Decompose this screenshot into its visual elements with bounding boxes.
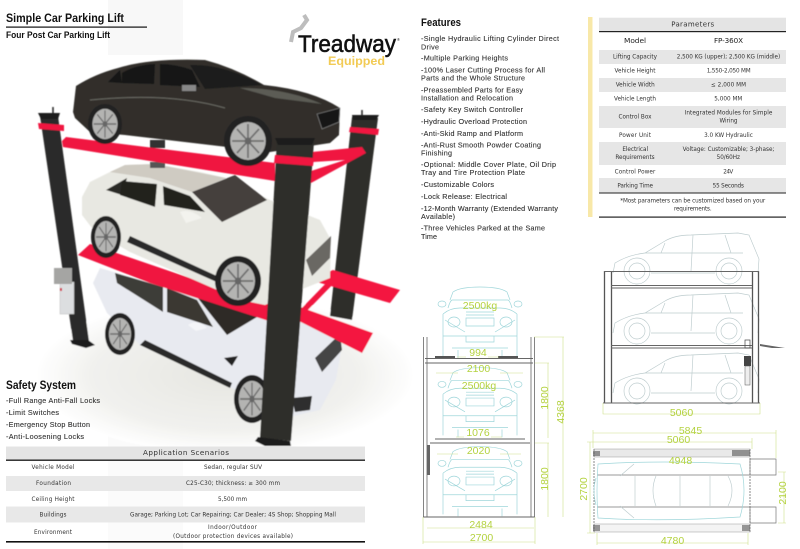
logo: Treadway Equipped: Equipped bbox=[328, 54, 385, 68]
table: parameters: Requirements bbox=[615, 155, 655, 161]
drawing: front elevation: 4368 bbox=[555, 400, 567, 424]
drawing: front elevation: 1800 bbox=[539, 386, 551, 410]
back right post bbox=[330, 110, 379, 320]
table: parameters: Power Unit bbox=[619, 133, 652, 139]
drawing: plan view: 2100 bbox=[777, 481, 789, 505]
text block: features: Time bbox=[421, 232, 437, 241]
text block: features bbox=[421, 17, 559, 241]
table: parameters: 55 Seconds bbox=[713, 183, 744, 189]
table: application scenarios: C25-C30; thickness: ≥ 300 mm bbox=[186, 481, 280, 487]
drawing: front elevation: 2020 bbox=[467, 445, 490, 457]
table: parameters: Vehicle Height bbox=[614, 69, 656, 75]
drawing: plan view bbox=[578, 425, 789, 547]
drawing: front elevation bbox=[423, 287, 567, 544]
table: parameters: Model bbox=[624, 36, 646, 45]
drawing: front elevation: 2500kg bbox=[463, 300, 497, 312]
floor shadow bbox=[35, 297, 415, 453]
table: parameters: Parking Time bbox=[617, 183, 654, 189]
logo: Treadway Equipped bbox=[291, 15, 400, 68]
text block: features: -100% Laser Cutting Process for All bbox=[421, 66, 545, 74]
photo: four post lift with three cars bbox=[35, 60, 415, 453]
front post bbox=[255, 138, 315, 446]
text block: features: -Preassembled Parts for Easy bbox=[421, 86, 523, 94]
table: parameters: Control Box bbox=[618, 115, 652, 121]
table: parameters: Integrated Modules for Simple bbox=[685, 111, 773, 117]
back left post bbox=[38, 107, 95, 348]
table: parameters: Vehicle Length bbox=[614, 97, 656, 103]
text block: features: -12-Month Warranty (Extended Warranty bbox=[421, 204, 558, 213]
table: application scenarios: Buildings bbox=[40, 512, 67, 518]
logo: Treadway Equipped: ® bbox=[397, 37, 400, 42]
table: application scenarios: Indoor/Outdoor bbox=[208, 525, 258, 531]
table: application scenarios: Sedan, regular SUV bbox=[204, 465, 262, 471]
hydraulic power unit bbox=[54, 268, 74, 314]
table: application scenarios bbox=[6, 446, 365, 543]
text block: features: Available) bbox=[421, 212, 455, 221]
text block: features: Drive bbox=[421, 42, 439, 52]
drawing: front elevation: 1076 bbox=[466, 427, 490, 439]
table: parameters: ≤ 2,000 MM bbox=[711, 83, 746, 89]
text block: features: -Anti-Rust Smooth Powder Coating bbox=[421, 140, 541, 150]
table: parameters: 24V bbox=[723, 169, 733, 175]
drawing: plan view: 2700 bbox=[578, 477, 590, 501]
text block: features: -Single Hydraulic Lifting Cylinder Direct bbox=[421, 34, 559, 43]
text block: features: -Optional: Middle Cover Plate, Oil Drip bbox=[421, 160, 556, 169]
table: parameters: *Most parameters can be customized based on your bbox=[620, 199, 766, 205]
drawing: plan view: 5845 bbox=[679, 425, 702, 437]
table: parameters: FP-360X bbox=[714, 36, 743, 45]
text block: features: Finishing bbox=[421, 148, 452, 158]
drawing: front elevation: 1800 bbox=[539, 467, 551, 491]
table: parameters: Lifting Capacity bbox=[613, 55, 658, 61]
top platform bbox=[62, 137, 366, 183]
table: parameters: Parameters bbox=[671, 20, 715, 28]
drawing: side elevation bbox=[603, 233, 785, 419]
table: application scenarios: Application Scenarios bbox=[143, 448, 229, 457]
text block: features: -Hydraulic Overload Protection bbox=[421, 117, 527, 126]
heading: product title: Four Post Car Parking Lift bbox=[6, 30, 110, 40]
text block: features: -Safety Key Switch Controller bbox=[421, 105, 524, 114]
logo: Treadway Equipped: Treadway bbox=[298, 31, 396, 58]
accent bar bbox=[588, 17, 592, 217]
table: application scenarios: 5,500 mm bbox=[218, 497, 247, 503]
text block: safety system: -Full Range Anti-Fall Locks bbox=[6, 396, 100, 405]
table: parameters: Electrical bbox=[622, 147, 648, 153]
drawing: side elevation: 5060 bbox=[670, 407, 693, 419]
top car: black sedan bbox=[73, 60, 340, 166]
text block: safety system bbox=[6, 380, 100, 441]
table: parameters: 5,000 MM bbox=[714, 97, 742, 103]
table: parameters: Control Power bbox=[615, 169, 656, 175]
table: parameters: 2,500 KG (upper); 2,500 KG (middle) bbox=[677, 55, 780, 61]
heading: product title: Simple Car Parking Lift bbox=[6, 11, 124, 25]
middle car: white SUV bbox=[82, 164, 331, 306]
text block: features: Parts and the Whole Structure bbox=[421, 74, 525, 82]
table: parameters: requirements. bbox=[674, 207, 712, 213]
text block: features: -Three Vehicles Parked at the Same bbox=[421, 224, 545, 232]
drawing: front elevation: 2484 bbox=[469, 519, 493, 531]
text block: features: -Anti-Skid Ramp and Platform bbox=[421, 129, 523, 138]
drawing: front elevation: 2500kg bbox=[462, 380, 496, 392]
text block: features: -Customizable Colors bbox=[421, 180, 494, 189]
drawing: plan view: 4948 bbox=[669, 455, 692, 467]
table: application scenarios: Garage; Parking Lot; Car Repairing; Car Dealer; 4S Shop; Shopping Mall bbox=[130, 512, 336, 518]
table: application scenarios: Foundation bbox=[36, 481, 71, 487]
text block: features: -Multiple Parking Heights bbox=[421, 54, 508, 62]
drawing: front elevation: 2700 bbox=[470, 532, 493, 544]
table: parameters: 50/60Hz bbox=[717, 155, 740, 161]
text block: features: -Lock Release: Electrical bbox=[421, 192, 507, 201]
table: application scenarios: (Outdoor protection devices available) bbox=[173, 534, 293, 540]
bottom car: white SUV bbox=[93, 268, 342, 423]
table: application scenarios: Environment bbox=[34, 530, 73, 536]
table: parameters bbox=[599, 18, 786, 218]
table: parameters: Vehicle Width bbox=[616, 83, 655, 89]
table: parameters: Wiring bbox=[720, 119, 738, 125]
text block: features: Features bbox=[421, 17, 461, 29]
text block: safety system: -Emergency Stop Button bbox=[6, 420, 90, 429]
drawing: plan view: 4780 bbox=[661, 535, 684, 547]
middle platform and ramps bbox=[78, 244, 400, 353]
table: parameters: 1,550-2,050 MM bbox=[707, 69, 751, 75]
heading: product title bbox=[6, 11, 147, 40]
table: parameters: Voltage: Customizable; 3-phase; bbox=[683, 147, 774, 153]
table: application scenarios: Ceiling Height bbox=[32, 497, 75, 503]
table: application scenarios: Vehicle Model bbox=[32, 465, 75, 471]
text block: safety system: -Limit Switches bbox=[6, 408, 59, 417]
text block: features: Tray and Tire Protection Plate bbox=[421, 168, 525, 177]
drawing: front elevation: 2100 bbox=[467, 363, 490, 375]
text block: safety system: -Anti-Loosening Locks bbox=[6, 432, 84, 441]
drawing: front elevation: 994 bbox=[469, 347, 487, 359]
table: parameters: 3.0 KW Hydraulic bbox=[704, 133, 753, 139]
text block: features: Installation and Relocation bbox=[421, 94, 513, 102]
drawing: plan view: 5060 bbox=[667, 434, 690, 446]
text block: safety system: Safety System bbox=[6, 380, 76, 392]
